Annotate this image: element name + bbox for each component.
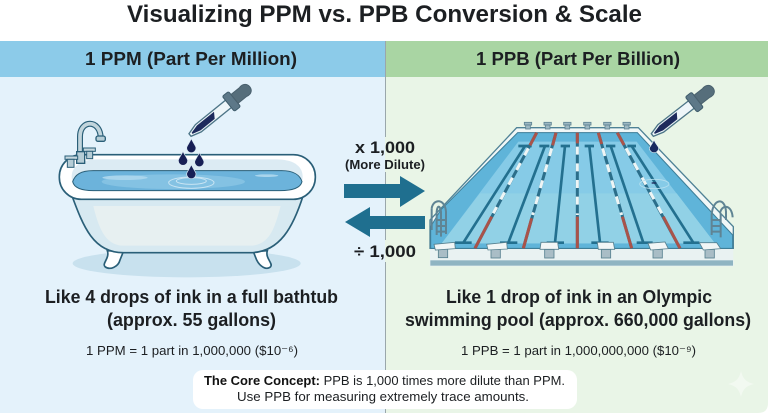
text: PPM formula: 1 PPM = 1 part in 1,000,000 ($10⁻⁶) — [86, 344, 298, 358]
dropper — [646, 80, 719, 143]
lane lines — [455, 146, 699, 243]
deck — [430, 248, 733, 260]
pool floor — [442, 142, 715, 243]
label: x 1,000 more dilute — [345, 138, 425, 172]
callout: core concept: Use PPB for measuring extremely trace amounts. — [237, 390, 529, 404]
ripples — [169, 177, 214, 188]
label: x 1,000 more dilute: (More Dilute) — [345, 158, 425, 172]
panel: PPB — [385, 41, 768, 413]
pool walls — [431, 133, 733, 248]
header: PPB: 1 PPB (Part Per Billion) — [476, 49, 680, 69]
header: PPM — [0, 41, 385, 77]
text: PPB analogy: swimming pool (approx. 660,000 gallons) — [405, 310, 751, 330]
ladders — [432, 201, 733, 237]
panel: PPM — [0, 41, 385, 413]
icon: sparkle — [728, 371, 754, 397]
tub body — [72, 195, 303, 253]
header: PPB — [385, 41, 768, 77]
title: Visualizing PPM vs. PPB Conversion & Scale — [127, 1, 642, 28]
far starting blocks — [524, 122, 630, 129]
header: PPM: 1 PPM (Part Per Million) — [85, 49, 297, 69]
icon: swimming pool with dropper — [430, 80, 733, 266]
arrow: left — [345, 207, 425, 237]
text: PPB analogy: Like 1 drop of ink in an Olympic — [446, 287, 712, 307]
text: PPB analogy — [405, 287, 751, 330]
text: PPM analogy — [45, 287, 338, 330]
icon: bathtub with dropper — [59, 79, 315, 277]
faucet — [65, 124, 105, 167]
text: PPM analogy: Like 4 drops of ink in a full bathtub — [45, 287, 338, 307]
ink drop — [649, 140, 659, 153]
near starting blocks — [434, 242, 721, 258]
callout: core concept: The Core Concept: PPB is 1,000 times more dilute than PPM. — [204, 374, 565, 388]
tub feet — [104, 251, 123, 268]
dropper — [184, 79, 256, 143]
text: PPM analogy: (approx. 55 gallons) — [107, 310, 276, 330]
text: PPB formula: 1 PPB = 1 part in 1,000,000,000 ($10⁻⁹) — [461, 344, 696, 358]
ripple — [640, 179, 669, 189]
pool coping — [430, 128, 733, 248]
callout: core concept — [193, 370, 577, 409]
ink drops — [178, 139, 204, 179]
water — [73, 171, 302, 191]
label: x 1,000 more dilute: x 1,000 — [355, 138, 415, 157]
lane ropes — [475, 133, 680, 248]
label: divide 1,000: ÷ 1,000 — [354, 242, 416, 261]
tub rim — [59, 155, 315, 199]
arrow: right — [344, 176, 425, 207]
